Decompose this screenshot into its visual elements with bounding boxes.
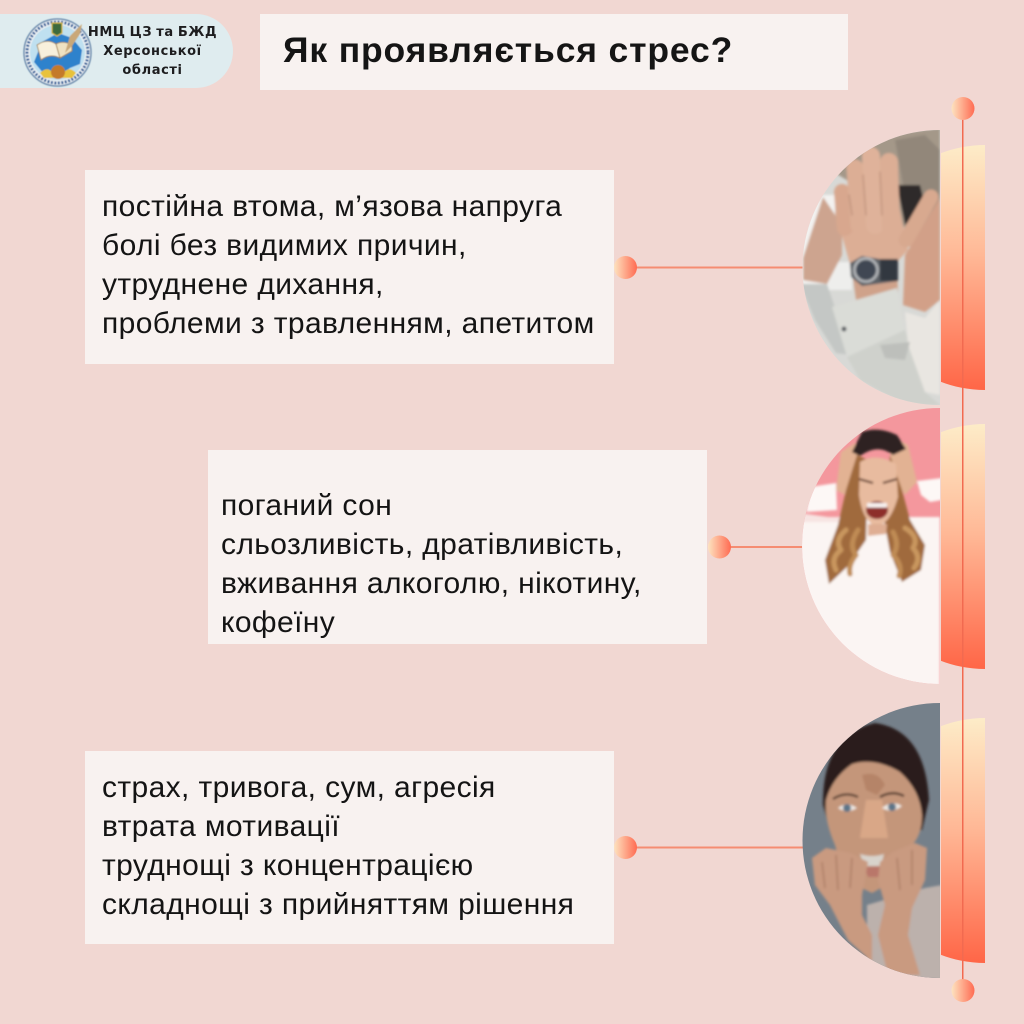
panel: emotional symptoms [85,751,614,944]
panel: behavioural symptoms: вживання алкоголю, нікотину, [221,567,642,600]
photo 2: screaming woman [800,405,942,690]
timeline vertical line [962,108,964,990]
gradient half circle 1 [941,145,985,390]
panel: physical symptoms: проблеми з травленням, апетитом [102,307,595,340]
gradient half circle 3 [941,718,985,963]
panel: behavioural symptoms: кофеїну [221,606,335,639]
gradient half circle 2 [941,424,985,669]
panel: behavioural symptoms [208,450,707,644]
connector 2 [708,536,804,558]
photo 1: man holding head [800,128,942,408]
logo emblem [22,18,92,88]
connector 1 [614,256,804,279]
logo badge [0,14,233,88]
title bar [260,14,848,90]
panel: physical symptoms [85,170,614,364]
timeline top dot [952,97,974,120]
connector 3 [614,836,804,859]
panel: emotional symptoms: втрата мотивації [102,810,340,843]
panel: physical symptoms: постійна втома, м’язова напруга [102,190,562,223]
panel: physical symptoms: болі без видимих причин, [102,229,467,262]
decorative graphics: timeline, gradient half circles, photos [614,97,985,1002]
panel: emotional symptoms: труднощі з концентрацією [102,849,474,882]
panel: physical symptoms: утруднене дихання, [102,268,384,301]
panel: behavioural symptoms: сльозливість, дратівливість, [221,528,623,561]
logo text: НМЦ ЦЗ та БЖД [88,24,217,40]
panel: emotional symptoms: страх, тривога, сум, агресія [102,771,496,804]
photo 3: anxious woman biting nails [800,700,942,982]
panel: emotional symptoms: складнощі з прийняттям рішення [102,888,574,921]
panel: behavioural symptoms: поганий сон [221,489,392,522]
title: Як проявляється стрес? [283,30,733,70]
logo text [88,24,217,78]
timeline bottom dot [952,979,974,1002]
logo text: області [122,63,183,78]
logo text: Херсонської [103,44,202,59]
